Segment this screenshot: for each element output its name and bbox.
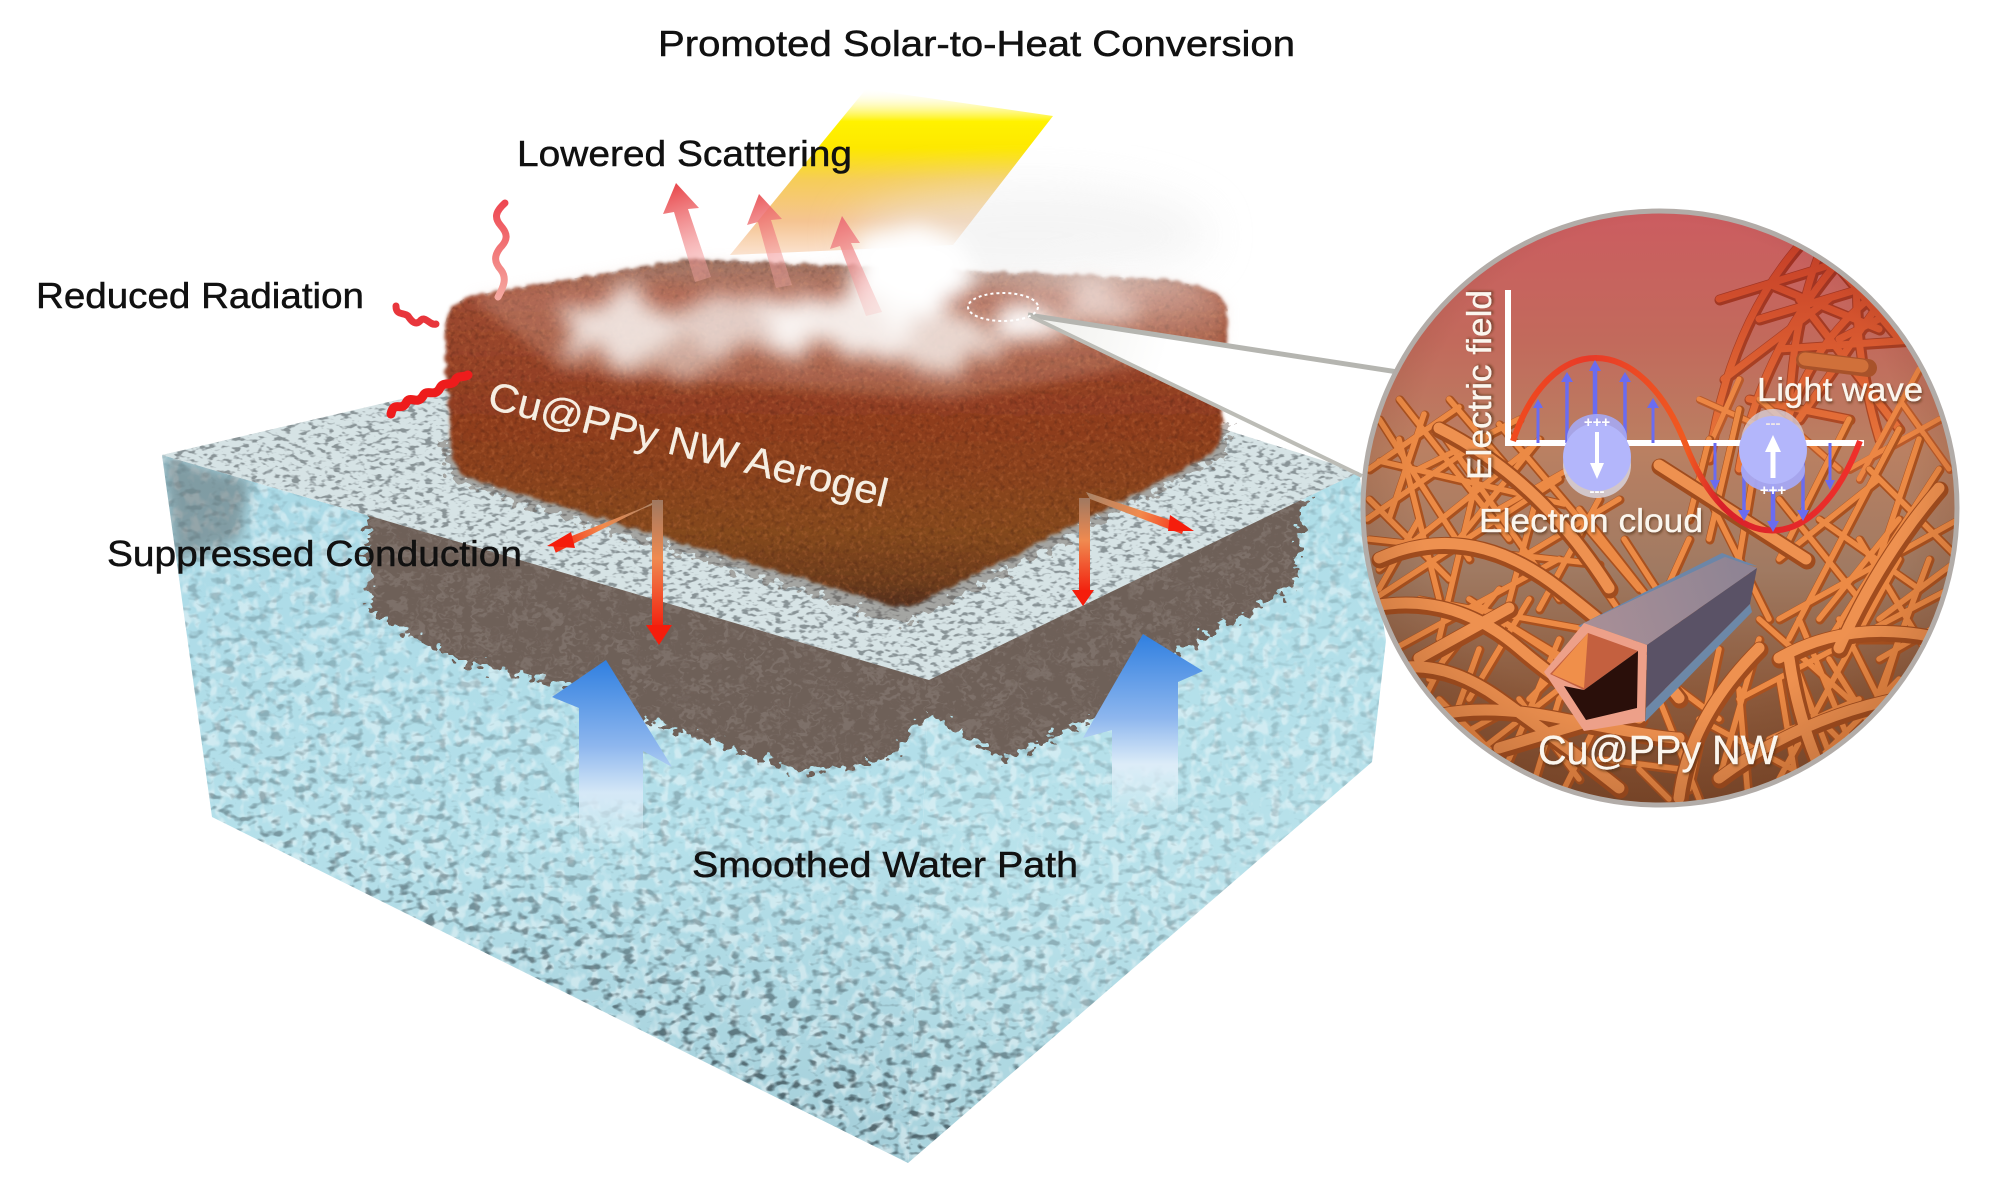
radiation wavy arrows xyxy=(391,203,506,414)
electron cloud left: +++ xyxy=(1584,414,1610,431)
electron cloud left xyxy=(1563,414,1631,500)
upper radiation wave xyxy=(396,306,436,324)
scattering arrows xyxy=(663,183,882,316)
tube front rim xyxy=(1544,623,1647,731)
left water arrow xyxy=(552,660,672,850)
label: suppressed conduction: Suppressed Conduction xyxy=(107,533,522,574)
arrow 2 xyxy=(747,194,792,288)
arrow 3 xyxy=(830,216,882,316)
water block right face xyxy=(908,472,1386,1163)
dashed sample ellipse xyxy=(968,293,1038,321)
aerogel shadow inside water xyxy=(365,480,1306,773)
inner back facet xyxy=(1550,633,1638,690)
water block xyxy=(162,388,1386,1163)
fiber ring upper right xyxy=(1699,229,1950,480)
field vectors up xyxy=(1533,360,1659,443)
label: aerogel: Cu@PPy NW Aerogel xyxy=(484,374,892,516)
label: smoothed water path: Smoothed Water Path xyxy=(692,844,1078,885)
axes xyxy=(1508,290,1864,443)
field vectors down xyxy=(1710,443,1835,532)
blue edge strip bottom xyxy=(1645,604,1752,722)
label: nanowire: Cu@PPy NW xyxy=(1538,727,1778,773)
conduction arrows xyxy=(547,492,1194,645)
aerogel body xyxy=(444,259,1228,607)
heading: solar conversion: Promoted Solar-to-Heat Conversion xyxy=(658,23,1295,64)
light wave curve xyxy=(1513,358,1860,531)
lower radiation wave xyxy=(391,375,468,414)
tube top face xyxy=(1584,557,1757,645)
water block left face xyxy=(162,455,929,1163)
inner left facet xyxy=(1552,633,1588,688)
right water arrow xyxy=(1083,634,1203,820)
lens contents xyxy=(1360,205,1960,815)
label: electron cloud: Electron cloud xyxy=(1479,502,1703,539)
label: light wave: Light wave xyxy=(1757,371,1923,408)
aerogel hazy top xyxy=(470,259,1228,400)
nanowire tube icon xyxy=(1544,553,1757,731)
water block top face xyxy=(162,301,1359,680)
blue edge strip top xyxy=(1578,553,1757,630)
top face ripple texture xyxy=(162,301,1359,680)
electron cloud left: --- xyxy=(1590,483,1604,500)
sunlight beam xyxy=(730,89,1053,255)
steam clouds xyxy=(562,185,1230,377)
aerogel light speckle xyxy=(444,259,1228,607)
electron cloud right xyxy=(1739,409,1807,499)
electric field chart xyxy=(1508,290,1864,532)
magnified lens xyxy=(1360,205,1960,815)
water transport arrows xyxy=(552,634,1203,850)
tube side face xyxy=(1646,568,1757,708)
top face shadow halo xyxy=(440,420,1230,625)
arrow 1 xyxy=(663,183,711,282)
label: electric field: Electric field xyxy=(1461,290,1499,480)
electron cloud right: --- xyxy=(1766,415,1780,432)
lens border xyxy=(1363,211,1957,805)
water ripple texture xyxy=(150,440,1400,1170)
magnifying cone xyxy=(1028,315,1398,480)
electron cloud right: +++ xyxy=(1760,482,1786,499)
label: lowered scattering: Lowered Scattering xyxy=(517,133,852,174)
right conduction arrow xyxy=(1072,492,1194,606)
tube hollow xyxy=(1564,651,1638,720)
aerogel block xyxy=(444,259,1228,607)
fiber mesh xyxy=(1364,399,1960,810)
label: reduced radiation: Reduced Radiation xyxy=(36,275,364,316)
vertical radiation wave xyxy=(496,203,506,297)
aerogel dark speckle xyxy=(444,259,1228,607)
left conduction arrow xyxy=(547,500,672,645)
